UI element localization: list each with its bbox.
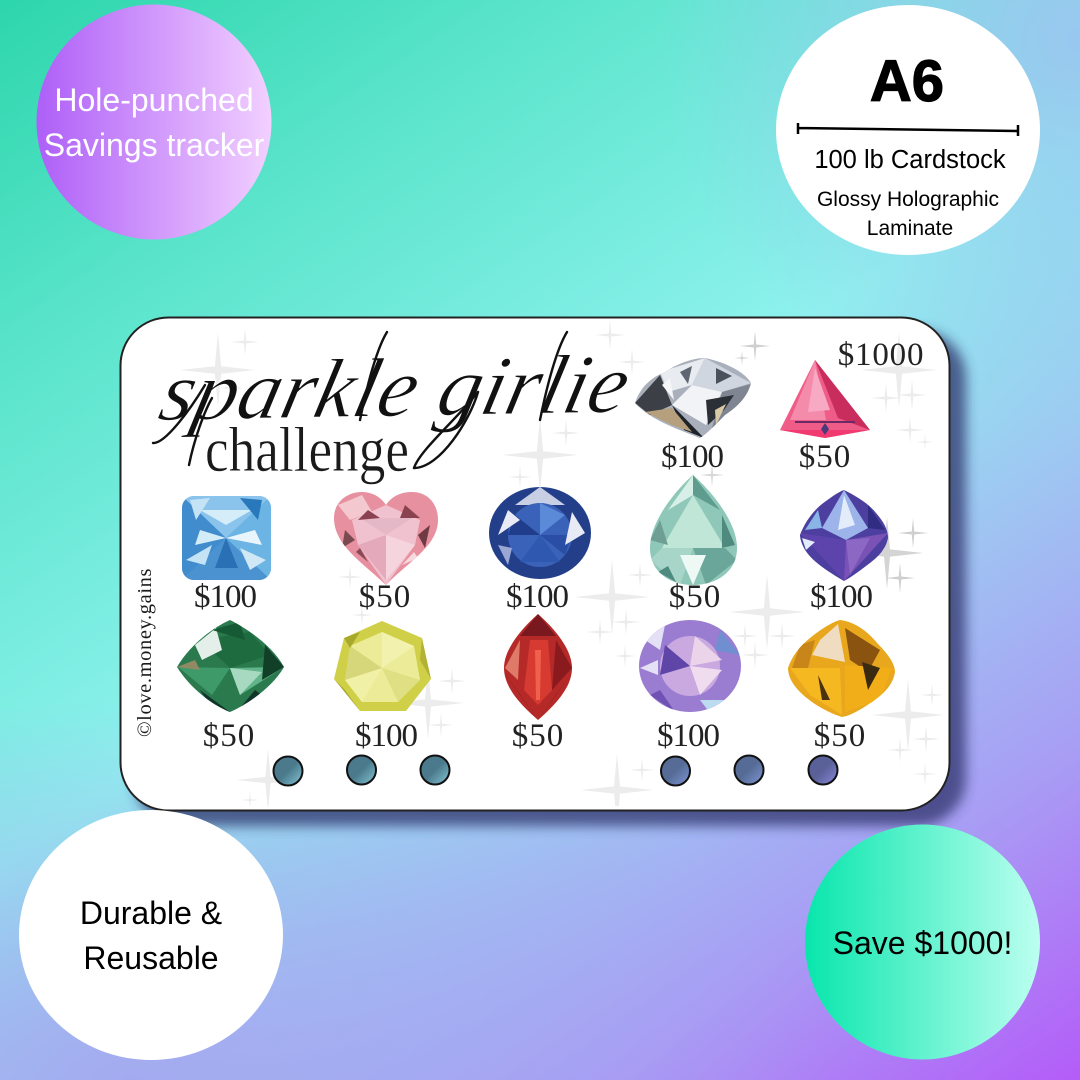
circle: hole-punched savings tracker: Savings tracker	[44, 127, 265, 163]
gem: mint pear	[648, 474, 740, 586]
gem: green cushion	[175, 618, 287, 714]
row 2 prices: $100	[194, 579, 256, 615]
row 3 prices: $50	[814, 718, 866, 754]
title flourishes	[153, 332, 567, 468]
circle: hole-punched savings tracker: Hole-punched	[54, 82, 254, 118]
gem: lilac round	[637, 618, 743, 715]
gem: white diamond	[633, 356, 753, 440]
gem: violet cushion	[798, 488, 890, 583]
circle: A6 card specifications: Glossy Holographic	[817, 188, 999, 211]
row 2 prices	[194, 439, 872, 615]
gem: pink heart	[330, 490, 440, 586]
heading: A6 size: A6	[870, 49, 944, 114]
punched holes	[274, 756, 838, 786]
row 3 prices: $50	[512, 718, 564, 754]
row 2 prices: $100	[810, 579, 872, 615]
panel: savings challenge card	[120, 318, 950, 826]
gem: pink triangle	[780, 360, 870, 438]
gem: blue cushion	[182, 496, 271, 580]
row 2 prices: $50	[359, 579, 411, 615]
card shadow	[134, 330, 966, 826]
circle: save $1000	[805, 824, 1040, 1060]
row 3 prices: $50	[203, 718, 255, 754]
row 2 prices: $50	[669, 579, 721, 615]
circle: durable and reusable	[19, 810, 283, 1060]
dimension line	[798, 123, 1018, 136]
circle: A6 card specifications: Laminate	[867, 217, 953, 240]
circle: durable and reusable: Durable &	[80, 895, 222, 931]
sparkle background	[180, 320, 944, 826]
row 2 prices: $100	[506, 579, 568, 615]
title: sparkle girlie script: sparkle girlie	[152, 338, 639, 439]
circle: durable and reusable: Reusable	[83, 940, 219, 976]
gem: navy round	[488, 486, 592, 580]
circle: A6 card specifications	[776, 5, 1040, 255]
gem: amber cushion	[786, 618, 898, 719]
row 3 prices: $100	[657, 718, 720, 754]
circle: A6 card specifications: 100 lb Cardstock	[814, 146, 1006, 174]
circle: save $1000: Save $1000!	[833, 925, 1012, 961]
circle: hole-punched savings tracker	[36, 4, 272, 240]
copyright handle: ©love.money.gains	[134, 568, 156, 737]
subtitle: challenge: challenge	[205, 414, 409, 485]
row 3 prices: $100	[355, 718, 418, 754]
gem: red marquise	[502, 612, 574, 722]
total amount: $1000	[838, 337, 924, 373]
row 2 prices: $50	[799, 439, 851, 475]
gem: yellow heptagon	[332, 619, 434, 713]
row 2 prices: $100	[661, 439, 724, 475]
row 3 prices	[203, 718, 866, 754]
